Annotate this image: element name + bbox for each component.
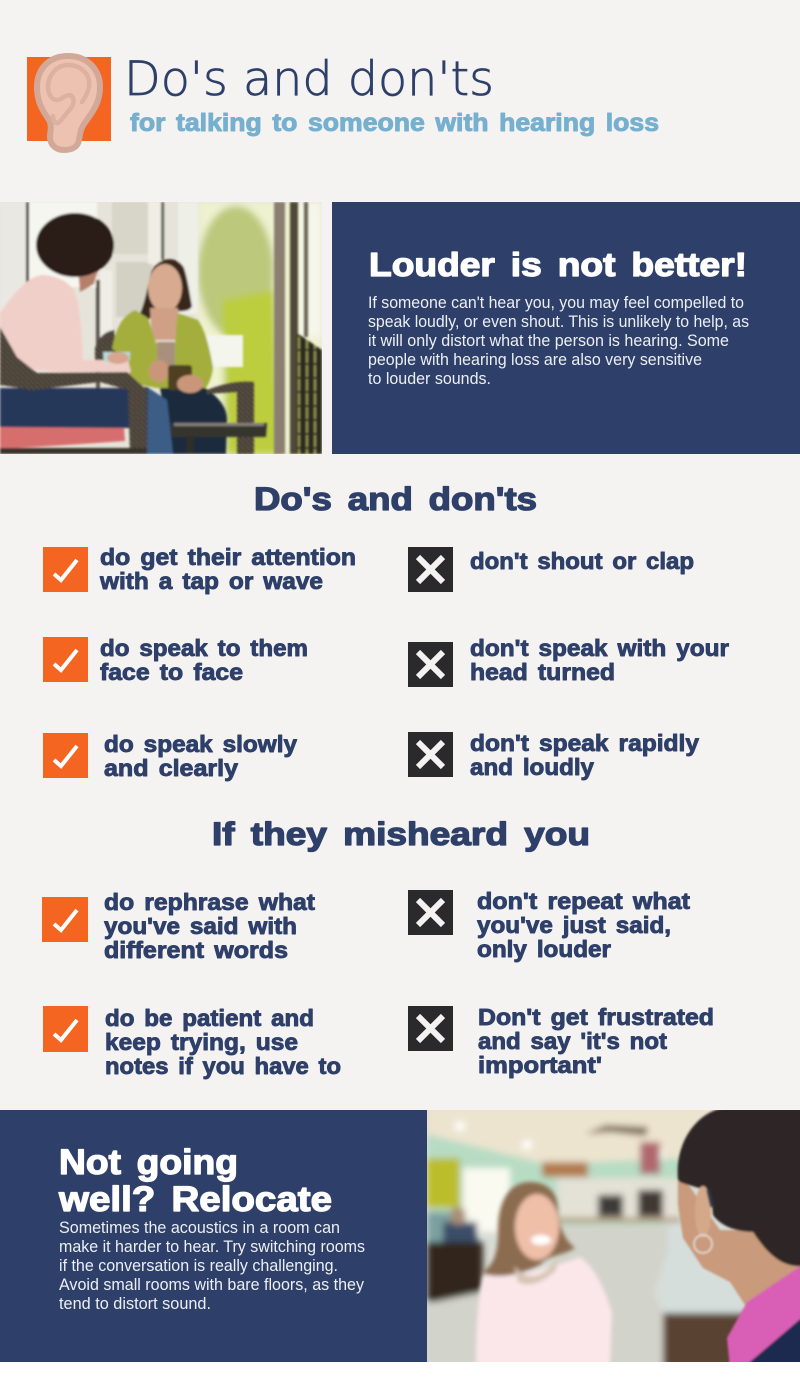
subtitle: for talking to someone with hearing loss (130, 109, 659, 137)
icon: check (42, 897, 88, 942)
text: get frustrated: important' (478, 1052, 602, 1078)
text: be patient: keep trying, use (105, 1029, 298, 1055)
text: speak slowly (104, 731, 297, 781)
icon: check (43, 1006, 88, 1052)
text: shout or clap: don't shout or clap (470, 548, 694, 574)
left woman hair (36, 213, 114, 277)
smiling woman face (515, 1194, 559, 1260)
don't: shout or clap (408, 547, 694, 592)
text: head turned: head turned (470, 659, 615, 685)
text: rephrase: do rephrase what (104, 889, 315, 915)
heading: not going well relocate: well? Relocate (58, 1180, 332, 1219)
text block: louder explanation: If someone can't hear you, you may feel compelled to (368, 294, 744, 312)
header (27, 52, 659, 150)
icon: cross (408, 642, 453, 687)
text: be patient (105, 1005, 341, 1079)
heading: not going well relocate: Not going (59, 1143, 238, 1182)
text: speak rapidly (470, 730, 699, 780)
heading: do's and don'ts: Do's and don'ts (254, 481, 537, 517)
text block: relocate explanation: Avoid small rooms with bare floors, as they (59, 1276, 365, 1294)
text block: louder explanation: it will only distort what the person is hearing. Some (368, 332, 729, 350)
right woman cardigan (112, 310, 213, 392)
text: get frustrated: Don't get frustrated (478, 1004, 714, 1030)
text: face to face: do speak to them (100, 635, 308, 661)
text: be patient: notes if you have to (105, 1053, 341, 1079)
left woman jeans (0, 386, 161, 446)
text block: relocate explanation (59, 1219, 365, 1313)
don't: speak rapidly (408, 730, 699, 780)
wicker arm (0, 327, 147, 454)
text block: relocate explanation: Sometimes the acoustics in a room can (59, 1219, 340, 1237)
shelf items (542, 1162, 588, 1177)
text: rephrase: you've said with (104, 913, 297, 939)
text: head turned (470, 635, 729, 685)
icon: ear on orange square (27, 56, 111, 150)
text: head turned: don't speak with your (470, 635, 729, 661)
heading: not going well relocate (58, 1143, 332, 1219)
right woman jeans (160, 388, 227, 454)
back chair arm (207, 382, 254, 454)
patterned chair (420, 1225, 668, 1368)
do: face to face (43, 635, 308, 685)
text: get their attention: with a tap or wave (99, 568, 323, 594)
text: repeat louder: only louder (477, 936, 611, 962)
panel: not going well (0, 1110, 427, 1362)
text: repeat louder: don't repeat what (477, 888, 690, 914)
icon: check (43, 547, 88, 592)
icon: cross (408, 890, 453, 935)
heading: if they misheard you: If they misheard you (212, 816, 590, 852)
text: face to face (100, 635, 308, 685)
text: get their attention (99, 544, 356, 594)
icon: check (43, 637, 88, 682)
window (463, 1168, 510, 1232)
don't: head turned (408, 635, 729, 687)
text: speak slowly: and clearly (104, 755, 238, 781)
text block: louder explanation (368, 294, 749, 388)
table (170, 423, 267, 437)
panel: louder is not better (332, 202, 800, 454)
left woman neck (78, 268, 98, 292)
heading: louder is not better: Louder is not better! (369, 246, 747, 283)
icon: check (43, 733, 88, 778)
text: face to face: face to face (100, 659, 243, 685)
text: speak rapidly: don't speak rapidly (470, 730, 699, 756)
right woman hair (678, 1108, 800, 1266)
text: speak slowly: do speak slowly (104, 731, 297, 757)
text: get frustrated: and say 'it's not (478, 1028, 667, 1054)
icon: cross (408, 732, 453, 777)
text block: louder explanation: speak loudly, or even shout. This is unlikely to help, as (368, 313, 749, 331)
text block: relocate explanation: if the conversation is really challenging. (59, 1257, 338, 1275)
do: rephrase (42, 889, 315, 963)
text: speak rapidly: and loudly (470, 754, 594, 780)
smiling woman hair (482, 1182, 575, 1276)
cafe patron and table (427, 1208, 454, 1248)
text block: louder explanation: people with hearing loss are also very sensitive (368, 351, 702, 369)
photo: woman with hearing aid in a cafe (420, 1100, 800, 1368)
photo: two women talking on a porch (0, 202, 322, 454)
text: rephrase: different words (104, 937, 288, 963)
text: rephrase (104, 889, 315, 963)
text: get their attention: do get their attention (100, 544, 356, 570)
text: be patient: do be patient and (105, 1005, 314, 1031)
do: speak slowly (43, 731, 297, 781)
smiling woman blouse (476, 1257, 612, 1368)
do: be patient (43, 1005, 341, 1079)
right woman hands and mug (149, 360, 169, 382)
back chair (95, 330, 118, 362)
icon: cross (408, 1006, 453, 1051)
cushion (0, 427, 125, 449)
do: get their attention (43, 544, 356, 594)
icon: cross (408, 547, 453, 592)
text block: relocate explanation: make it harder to hear. Try switching rooms (59, 1238, 365, 1256)
right woman hair (136, 259, 192, 325)
text: get frustrated (478, 1004, 714, 1078)
collar (727, 1263, 800, 1368)
left woman sweater (0, 275, 131, 372)
title: Do's and don'ts (124, 52, 494, 107)
text: repeat louder: you've just said, (477, 912, 671, 938)
text block: relocate explanation: tend to distort sound. (59, 1295, 211, 1313)
don't: repeat louder (408, 888, 690, 962)
right woman skin (678, 1170, 800, 1305)
back wall and floor (665, 1220, 743, 1319)
painting (427, 1158, 460, 1208)
text block: louder explanation: to louder sounds. (368, 370, 491, 388)
don't: get frustrated (408, 1004, 714, 1078)
right woman face and neck (148, 264, 182, 312)
ear and hearing aid (695, 1186, 711, 1238)
text: repeat louder (477, 888, 690, 962)
